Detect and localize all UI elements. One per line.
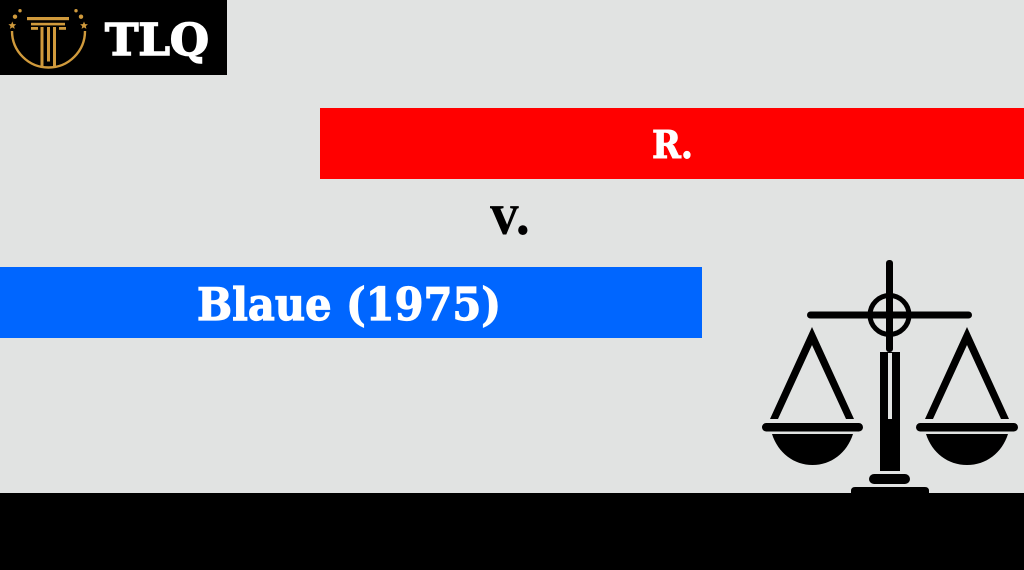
icon: gold pillar emblem [8,9,88,68]
footer band [0,493,1024,570]
icon: scales of justice [762,260,1018,493]
logo wordmark: TLQ [105,15,209,66]
banner: blue party name [0,267,702,338]
heading: R.: R. [652,122,693,167]
heading: versus: v. [490,181,530,247]
scale post and beam [807,260,972,493]
right pan [916,327,1018,465]
left pan [762,327,863,465]
heading: Blaue (1975): Blaue (1975) [197,278,501,331]
banner: red party name [320,108,1024,179]
logo: TLQ badge [0,0,227,75]
